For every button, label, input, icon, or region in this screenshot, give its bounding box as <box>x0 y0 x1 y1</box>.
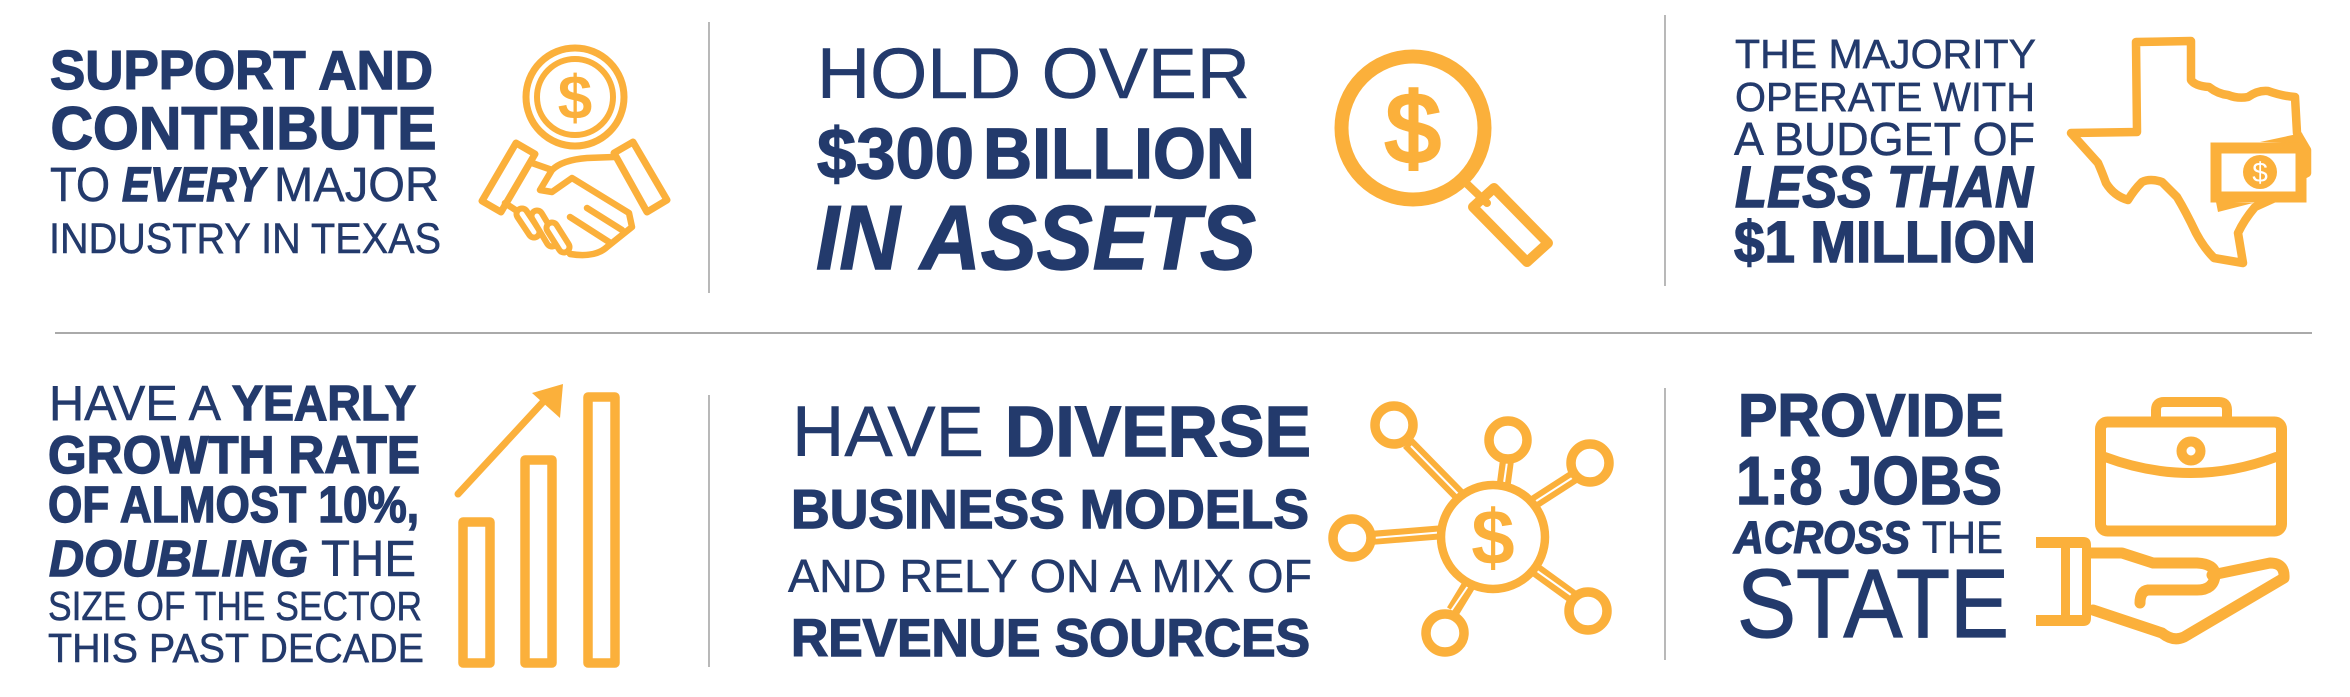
text block: diverse business models: AND RELY ON A MIX OF <box>788 550 1312 602</box>
text block: hold over 300 billion in assets: $300 <box>817 115 974 194</box>
text block: 1 in 8 jobs across the state: STATE <box>1737 549 2009 658</box>
panel: diverse business models <box>788 393 1609 668</box>
text block: majority budget under 1 million: OPERATE WITH <box>1735 74 2035 120</box>
icon: money network <box>1333 406 1609 652</box>
panel: yearly growth <box>48 377 615 671</box>
icon: handshake with coin: $ <box>558 64 592 133</box>
text block: yearly growth rate: THE <box>321 530 416 587</box>
icon: money network: $ <box>1471 493 1515 581</box>
text block: majority budget under 1 million: THE MAJORITY <box>1735 31 2036 77</box>
text block: diverse business models: DIVERSE <box>1005 393 1311 472</box>
text block: 1 in 8 jobs across the state: THE <box>1922 512 2003 563</box>
icon: rising bar chart with arrow <box>458 384 615 663</box>
text block: support and contribute: EVERY <box>122 159 267 212</box>
text block: hold over 300 billion in assets <box>816 35 1256 289</box>
text block: yearly growth rate: HAVE A <box>49 377 221 431</box>
text block: yearly growth rate: OF ALMOST 10%, <box>48 476 419 533</box>
text block: majority budget under 1 million <box>1734 31 2036 275</box>
text block: hold over 300 billion in assets: IN ASSETS <box>816 188 1256 289</box>
text block: support and contribute: MAJOR <box>274 159 439 212</box>
panel: majority budget <box>1734 31 2307 275</box>
text block: 1 in 8 jobs across the state <box>1733 382 2009 658</box>
text block: support and contribute: SUPPORT AND <box>50 39 433 101</box>
text block: majority budget under 1 million: LESS THAN <box>1735 155 2034 220</box>
text block: hold over 300 billion in assets: HOLD OVER <box>817 35 1250 114</box>
text block: 1 in 8 jobs across the state: ACROSS <box>1733 512 1910 563</box>
icon: Texas map with money <box>2071 41 2307 263</box>
text block: yearly growth rate <box>48 377 424 671</box>
text block: yearly growth rate: THIS PAST DECADE <box>48 625 424 671</box>
text block: diverse business models: HAVE <box>792 393 984 472</box>
text block: 1 in 8 jobs across the state: 1:8 JOBS <box>1736 443 2002 519</box>
text block: majority budget under 1 million: A BUDGET OF <box>1734 113 2035 165</box>
text block: support and contribute: INDUSTRY IN TEXAS <box>49 215 441 263</box>
icon: handshake with coin <box>482 48 667 255</box>
text block: yearly growth rate: SIZE OF THE SECTOR <box>48 583 422 629</box>
text block: hold over 300 billion in assets: BILLION <box>983 115 1255 194</box>
text block: majority budget under 1 million: $1 MILLION <box>1734 210 2036 275</box>
panel: provide jobs <box>1733 382 2284 658</box>
icon: hand holding briefcase <box>2036 402 2284 639</box>
text block: diverse business models <box>788 393 1312 668</box>
text block: diverse business models: BUSINESS MODELS <box>791 478 1309 540</box>
text block: yearly growth rate: GROWTH RATE <box>48 426 420 485</box>
icon: magnifying glass <box>1342 56 1548 262</box>
text block: yearly growth rate: YEARLY <box>232 377 416 431</box>
text block: 1 in 8 jobs across the state: PROVIDE <box>1738 382 2004 449</box>
text block: support and contribute <box>49 39 441 263</box>
panel: hold over 300 billion <box>816 35 1548 289</box>
text block: support and contribute: TO <box>50 159 110 212</box>
text block: yearly growth rate: DOUBLING <box>49 530 308 587</box>
icon: magnifying glass: $ <box>1386 73 1440 183</box>
icon: Texas map with money: $ <box>2252 157 2268 188</box>
panel: support and contribute <box>49 39 667 263</box>
text block: diverse business models: REVENUE SOURCES <box>791 609 1310 668</box>
text block: support and contribute: CONTRIBUTE <box>50 95 436 162</box>
